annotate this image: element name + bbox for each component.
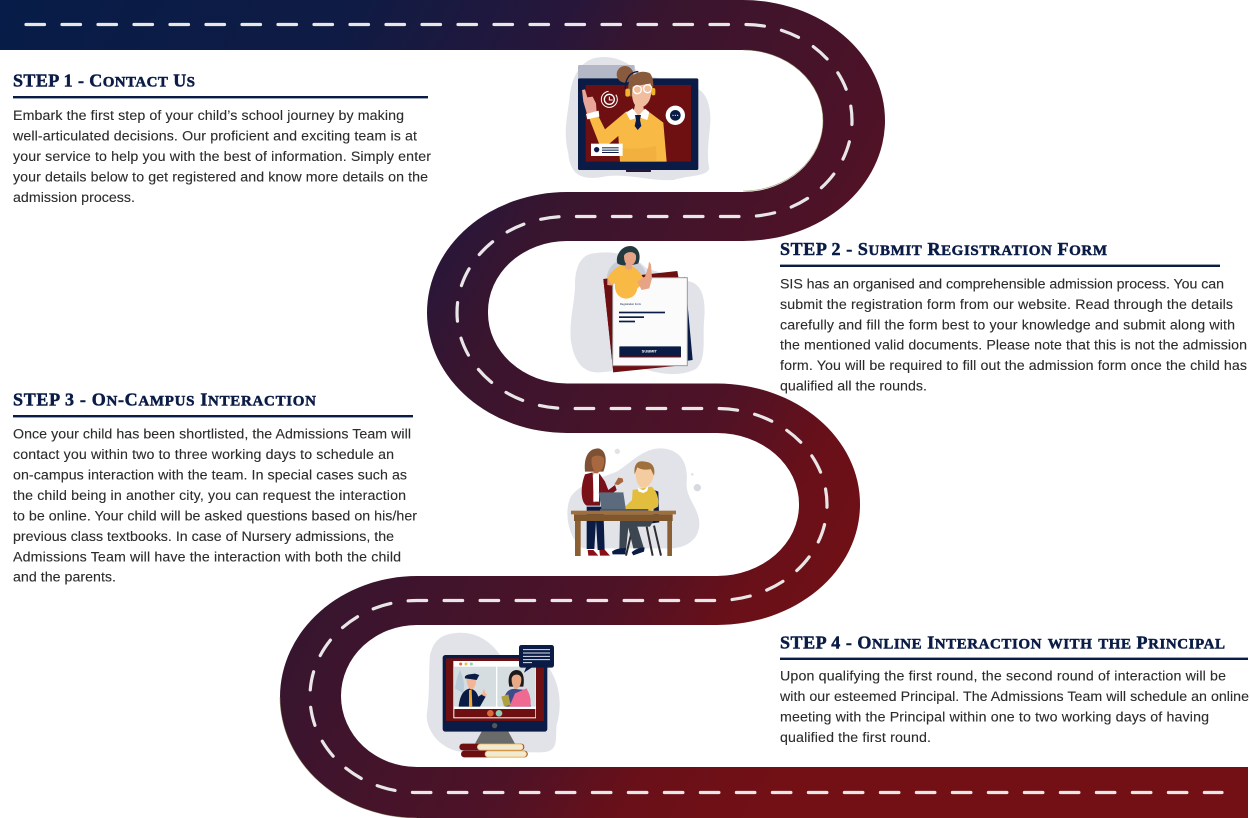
woman figure bbox=[582, 66, 667, 162]
step 2 body text: the mentioned valid documents. Please note that this is not the admission bbox=[780, 338, 1247, 354]
desk bbox=[571, 511, 676, 556]
step 2 body text: qualified all the rounds. bbox=[780, 379, 927, 395]
step 4 body text: meeting with the Principal within one to two working days of having bbox=[780, 710, 1209, 726]
step 3 heading: STEP 3 - On-Campus Interaction bbox=[13, 386, 316, 410]
step 3 body text: to be online. Your child will be asked questions based on his/her bbox=[13, 509, 417, 525]
step 3 body text: Once your child has been shortlisted, the Admissions Team will bbox=[13, 427, 411, 443]
step 1 body text bbox=[12, 108, 431, 206]
form sheet bbox=[613, 278, 687, 366]
step 2 body text: submit the registration form from our website. Read through the details bbox=[780, 297, 1233, 313]
step 3 body text: contact you within two to three working days to schedule an bbox=[13, 447, 394, 463]
books bbox=[459, 744, 528, 757]
icon: clock bbox=[601, 91, 617, 107]
step 2 body text bbox=[780, 276, 1247, 395]
form sheet: Registration Form bbox=[620, 302, 642, 306]
woman on screen bbox=[501, 670, 531, 707]
illustration: on-campus interaction at desk bbox=[567, 448, 701, 556]
form sheet: SUBMIT bbox=[642, 348, 658, 353]
step 3 block bbox=[13, 386, 417, 586]
step 4 rule bbox=[780, 658, 1248, 660]
step 3 rule bbox=[13, 415, 413, 417]
step 2 body text: carefully and fill the form best to your knowledge and submit along with bbox=[780, 317, 1235, 333]
man figure bbox=[612, 461, 658, 555]
chair bbox=[626, 490, 661, 556]
step 4 heading: STEP 4 - Online Interaction with the Principal bbox=[780, 629, 1225, 653]
step 3 body text: the child being in another city, you can request the interaction bbox=[13, 488, 406, 504]
step 1 body text: your service to help you with the best of information. Simply enter bbox=[13, 149, 431, 165]
step 2 body text: form. You will be required to fill out the admission form once the child has bbox=[780, 358, 1247, 374]
step 3 body text bbox=[13, 427, 417, 586]
step 3 body text: previous class textbooks. In case of Nursery admissions, the bbox=[13, 529, 394, 545]
woman figure bbox=[607, 246, 652, 299]
step 2 body text: SIS has an organised and comprehensible admission process. You can bbox=[780, 276, 1224, 292]
step 4 body text: with our esteemed Principal. The Admissions Team will schedule an online bbox=[779, 689, 1249, 705]
step 1 body text: your details below to get registered and know more details on the bbox=[13, 170, 428, 186]
monitor bbox=[443, 655, 547, 732]
step 1 body text: Embark the first step of your child’s school journey by making bbox=[13, 108, 404, 124]
monitor stand bbox=[475, 732, 515, 744]
step 2 rule bbox=[780, 265, 1220, 267]
step 4 body text bbox=[779, 669, 1249, 746]
illustration: registration form bbox=[570, 246, 705, 374]
step 2 block bbox=[780, 236, 1247, 395]
speech bubble bbox=[519, 645, 554, 673]
step 1 rule bbox=[13, 96, 428, 98]
step 1 block bbox=[12, 68, 431, 206]
step 3 body text: Admissions Team will have the interaction with both the child bbox=[13, 549, 401, 565]
icon: chat bbox=[666, 106, 685, 125]
illustration: woman with headset on tablet bbox=[566, 57, 710, 180]
step 4 body text: qualified the first round. bbox=[780, 730, 931, 746]
step 3 body text: and the parents. bbox=[13, 570, 116, 586]
man on screen bbox=[455, 670, 487, 707]
step 3 body text: on-campus interaction with the team. In special cases such as bbox=[13, 468, 407, 484]
step 1 heading: STEP 1 - Contact Us bbox=[13, 68, 195, 92]
step 1 body text: admission process. bbox=[13, 190, 135, 206]
step 1 body text: well-articulated decisions. Our proficient and exciting team is at bbox=[12, 128, 417, 144]
step 2 heading: STEP 2 - Submit Registration Form bbox=[780, 236, 1107, 260]
illustration: online meeting on monitor bbox=[427, 633, 560, 757]
laptop bbox=[599, 492, 648, 511]
profile card bbox=[591, 144, 623, 156]
step 4 block bbox=[779, 629, 1249, 746]
step 4 body text: Upon qualifying the first round, the second round of interaction will be bbox=[780, 669, 1226, 685]
woman figure bbox=[582, 448, 623, 556]
